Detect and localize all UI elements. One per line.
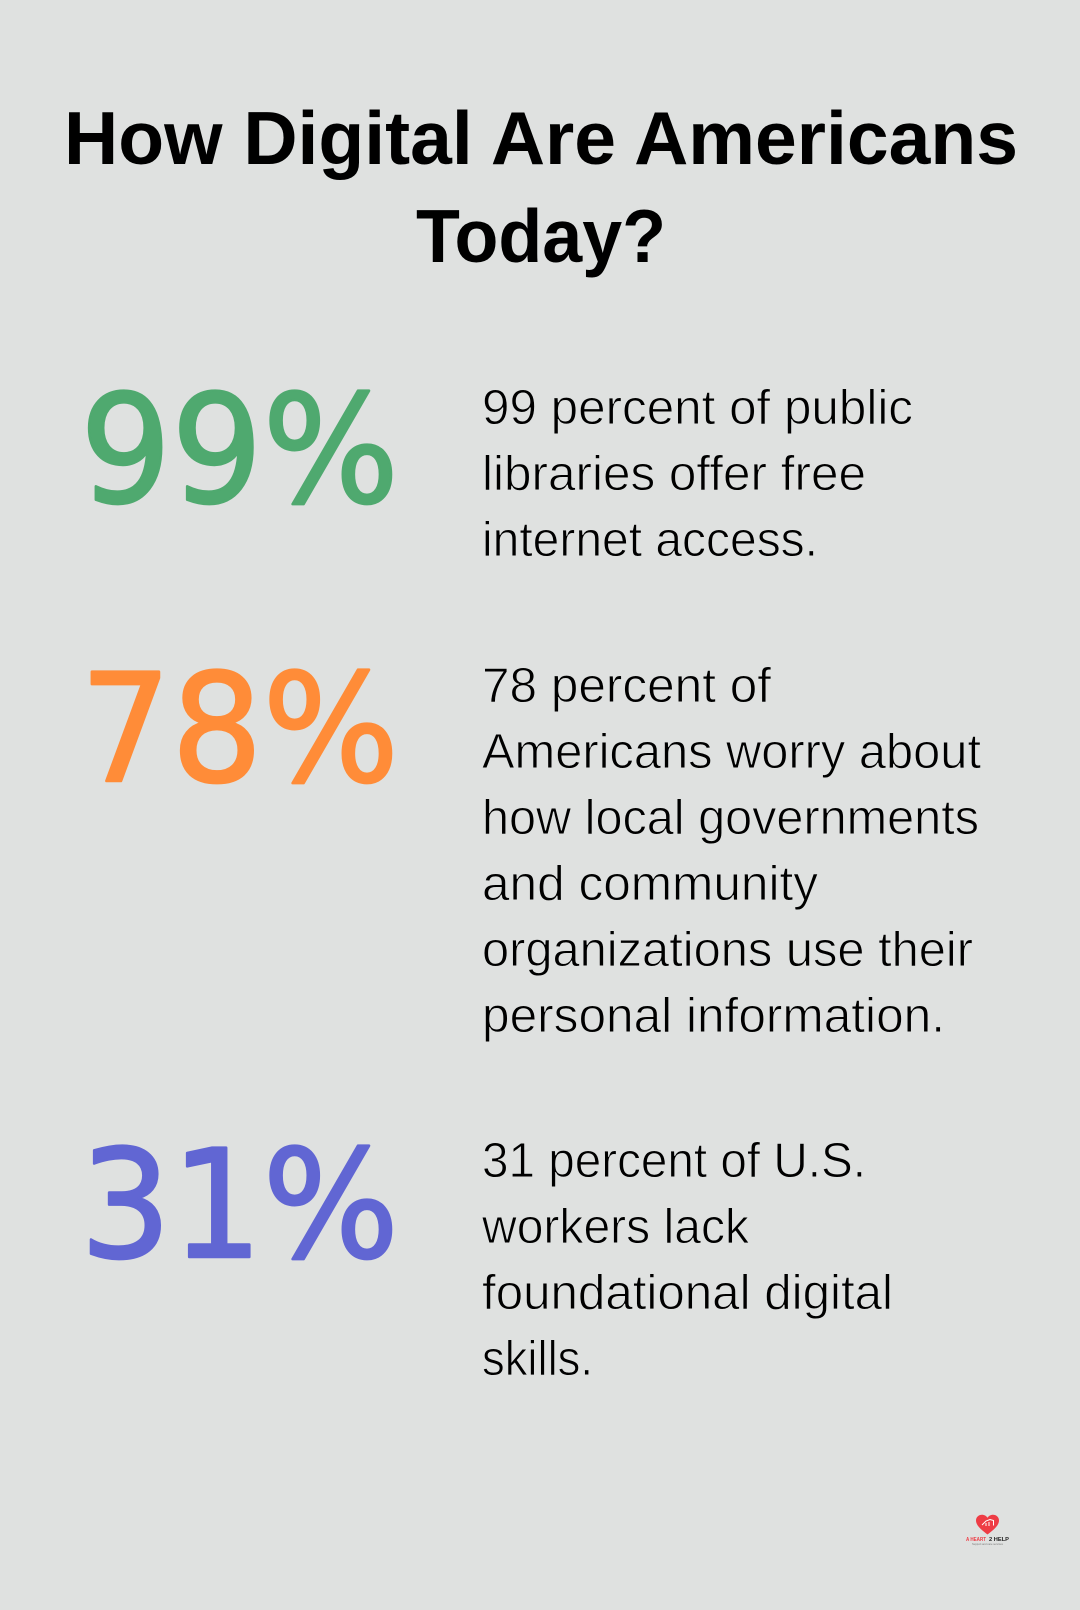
- text block: privacy worry: [482, 659, 981, 1043]
- stat: 31 percent: [80, 1119, 893, 1386]
- text block: libraries: 99 percent of public: [482, 381, 913, 435]
- title: How Digital Are Americans: [64, 96, 1018, 180]
- text block: libraries: internet access.: [482, 513, 818, 567]
- text block: digital skills: foundational digital: [482, 1266, 893, 1320]
- text block: privacy worry: and community: [482, 857, 818, 911]
- text block: digital skills: 31 percent of U.S.: [482, 1134, 866, 1188]
- text block: digital skills: workers lack: [481, 1200, 749, 1254]
- text block: privacy worry: personal information.: [482, 989, 945, 1043]
- text block: digital skills: [481, 1134, 893, 1386]
- logo: A Heart 2 Help: A HEART: [966, 1537, 987, 1543]
- text block: privacy worry: how local governments: [482, 791, 979, 845]
- stat: 99 percent: [80, 364, 913, 567]
- text block: digital skills: skills.: [482, 1332, 593, 1386]
- big number: 78%: 78%: [80, 643, 399, 817]
- icon: heart with hands: [976, 1515, 999, 1534]
- big number: 99%: 99%: [80, 364, 399, 538]
- text block: privacy worry: Americans worry about: [482, 725, 981, 779]
- title: Today?: [416, 194, 666, 278]
- logo: A Heart 2 Help: 2 HELP: [989, 1537, 1009, 1543]
- logo: A Heart 2 Help: Support and care services: [972, 1543, 1004, 1546]
- logo: A Heart 2 Help: [966, 1515, 1009, 1546]
- stat: 78 percent: [80, 643, 981, 1043]
- text block: libraries: libraries offer free: [482, 447, 866, 501]
- text block: privacy worry: organizations use their: [482, 923, 973, 977]
- title: [64, 96, 1018, 278]
- text block: libraries: [482, 381, 913, 567]
- text block: privacy worry: 78 percent of: [482, 659, 771, 713]
- big number: 31%: 31%: [80, 1119, 399, 1293]
